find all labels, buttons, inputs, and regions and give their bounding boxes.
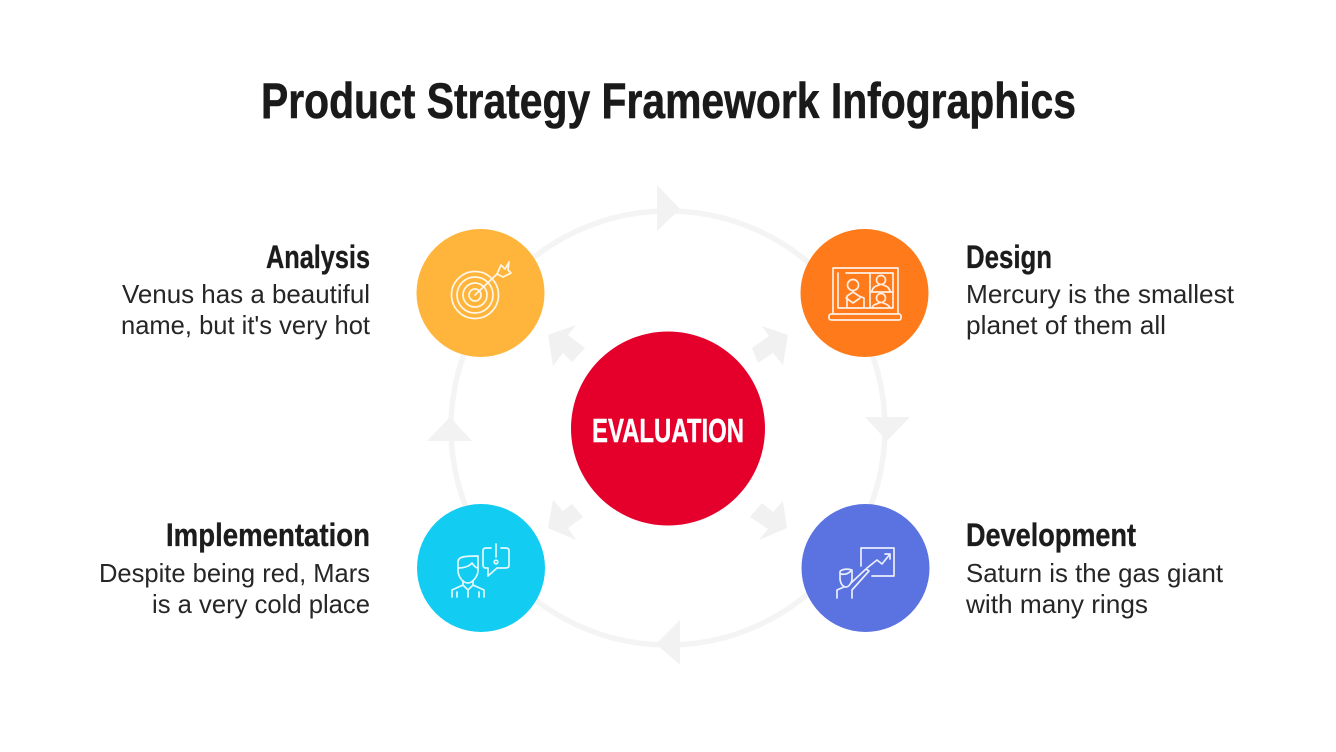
text: development: with many rings bbox=[965, 589, 1148, 619]
title: Product Strategy Framework Infographics bbox=[261, 73, 1076, 129]
centre circle: evaluation bbox=[571, 332, 765, 526]
text: development: Development bbox=[966, 517, 1136, 553]
text: implementation: Despite being red, Mars bbox=[99, 558, 370, 588]
text: analysis: Venus has a beautiful bbox=[122, 279, 370, 309]
text: development: Saturn is the gas giant bbox=[966, 558, 1224, 588]
outward arrows from centre bbox=[548, 325, 788, 540]
text: design: Mercury is the smallest bbox=[966, 279, 1235, 309]
circle: implementation bbox=[417, 504, 545, 632]
text: implementation: is a very cold place bbox=[152, 589, 370, 619]
centre circle: evaluation: EVALUATION bbox=[592, 412, 744, 449]
cycle ring with arrows bbox=[427, 185, 910, 665]
circle: development bbox=[802, 504, 930, 632]
icon: person with alert speech bubble bbox=[452, 544, 509, 597]
circle: design bbox=[800, 229, 928, 357]
text: implementation bbox=[99, 517, 370, 619]
text: development bbox=[965, 517, 1224, 619]
icon: target with arrow bbox=[452, 262, 511, 318]
text: analysis bbox=[121, 239, 371, 340]
text: design: Design bbox=[966, 239, 1052, 275]
text: design bbox=[966, 239, 1235, 340]
circle: analysis bbox=[416, 229, 544, 357]
icon: video call on laptop bbox=[829, 268, 901, 320]
text: analysis: Analysis bbox=[266, 239, 370, 275]
icon: presenter with growth chart bbox=[837, 548, 894, 598]
text: design: planet of them all bbox=[966, 310, 1166, 340]
text: implementation: Implementation bbox=[166, 517, 370, 553]
text: analysis: name, but it's very hot bbox=[121, 310, 371, 340]
